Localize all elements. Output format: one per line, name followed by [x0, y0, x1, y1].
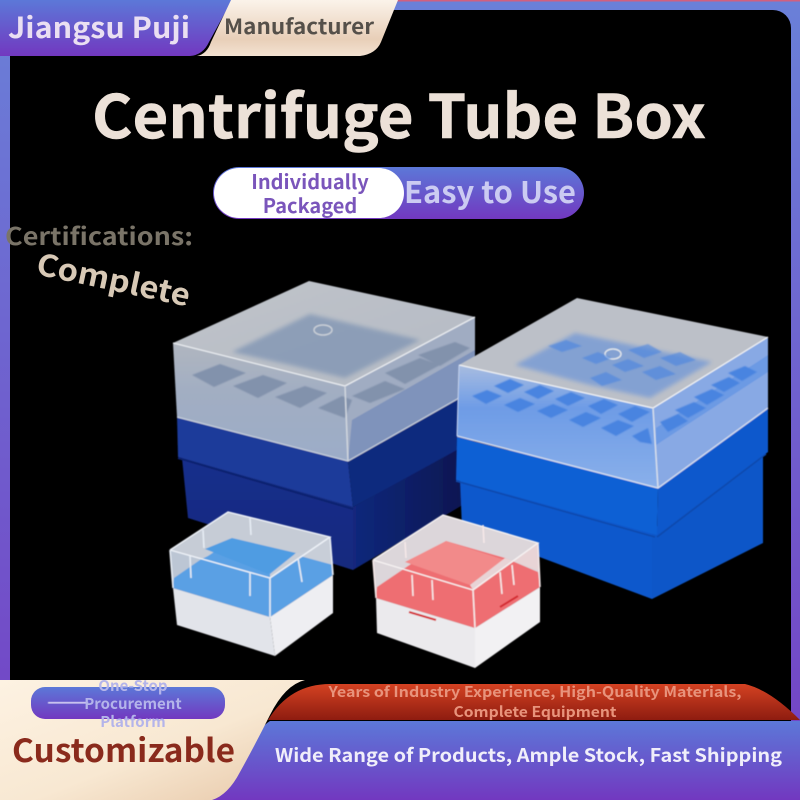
bottom blue banner — [200, 721, 800, 800]
platform pill — [31, 675, 225, 732]
product: navy box — [173, 281, 475, 570]
text: Easy to Use: Easy to Use — [404, 168, 576, 212]
text: Individually Packaged: Packaged — [263, 190, 357, 219]
blue box lid — [457, 298, 768, 488]
product: blue box — [456, 298, 768, 599]
text: Customizable: Customizable — [12, 726, 235, 772]
navy box lid — [173, 281, 475, 461]
certifications value, tilted: Complete — [33, 240, 195, 315]
text: Individually Packaged — [251, 166, 369, 219]
banner text — [327, 681, 742, 722]
lid body — [373, 515, 540, 628]
pill text: Platform — [100, 711, 166, 732]
blue insert — [173, 540, 333, 617]
badge text: Manufacturer: Manufacturer — [224, 11, 375, 41]
badge text: Jiangsu Puji: Jiangsu Puji — [8, 5, 190, 47]
product: small red box — [373, 515, 540, 668]
top badge: Jiangsu Puji — [0, 0, 232, 56]
title: Centrifuge Tube Box — [92, 69, 706, 156]
pill text: Procurement — [84, 693, 182, 714]
pill text — [84, 675, 182, 732]
banner text: Wide Range of Products, Ample Stock, Fast Shipping — [275, 741, 783, 768]
top badge: Manufacturer — [197, 0, 398, 56]
text: Individually Packaged: Individually — [251, 166, 369, 195]
certifications label: Certifications: — [5, 217, 193, 252]
white pill segment — [214, 168, 404, 218]
bottom red banner — [268, 681, 800, 722]
banner text: Complete Equipment — [454, 701, 616, 722]
banner text: Years of Industry Experience, High-Quality Materials, — [327, 681, 742, 702]
wells — [472, 340, 757, 444]
pill text: One-Stop — [98, 675, 168, 696]
product: small blue box — [170, 512, 333, 656]
bottom cream panel — [0, 675, 305, 800]
feature pill — [213, 166, 584, 219]
lid body — [170, 512, 333, 617]
red insert — [376, 541, 540, 628]
wells — [192, 342, 470, 418]
